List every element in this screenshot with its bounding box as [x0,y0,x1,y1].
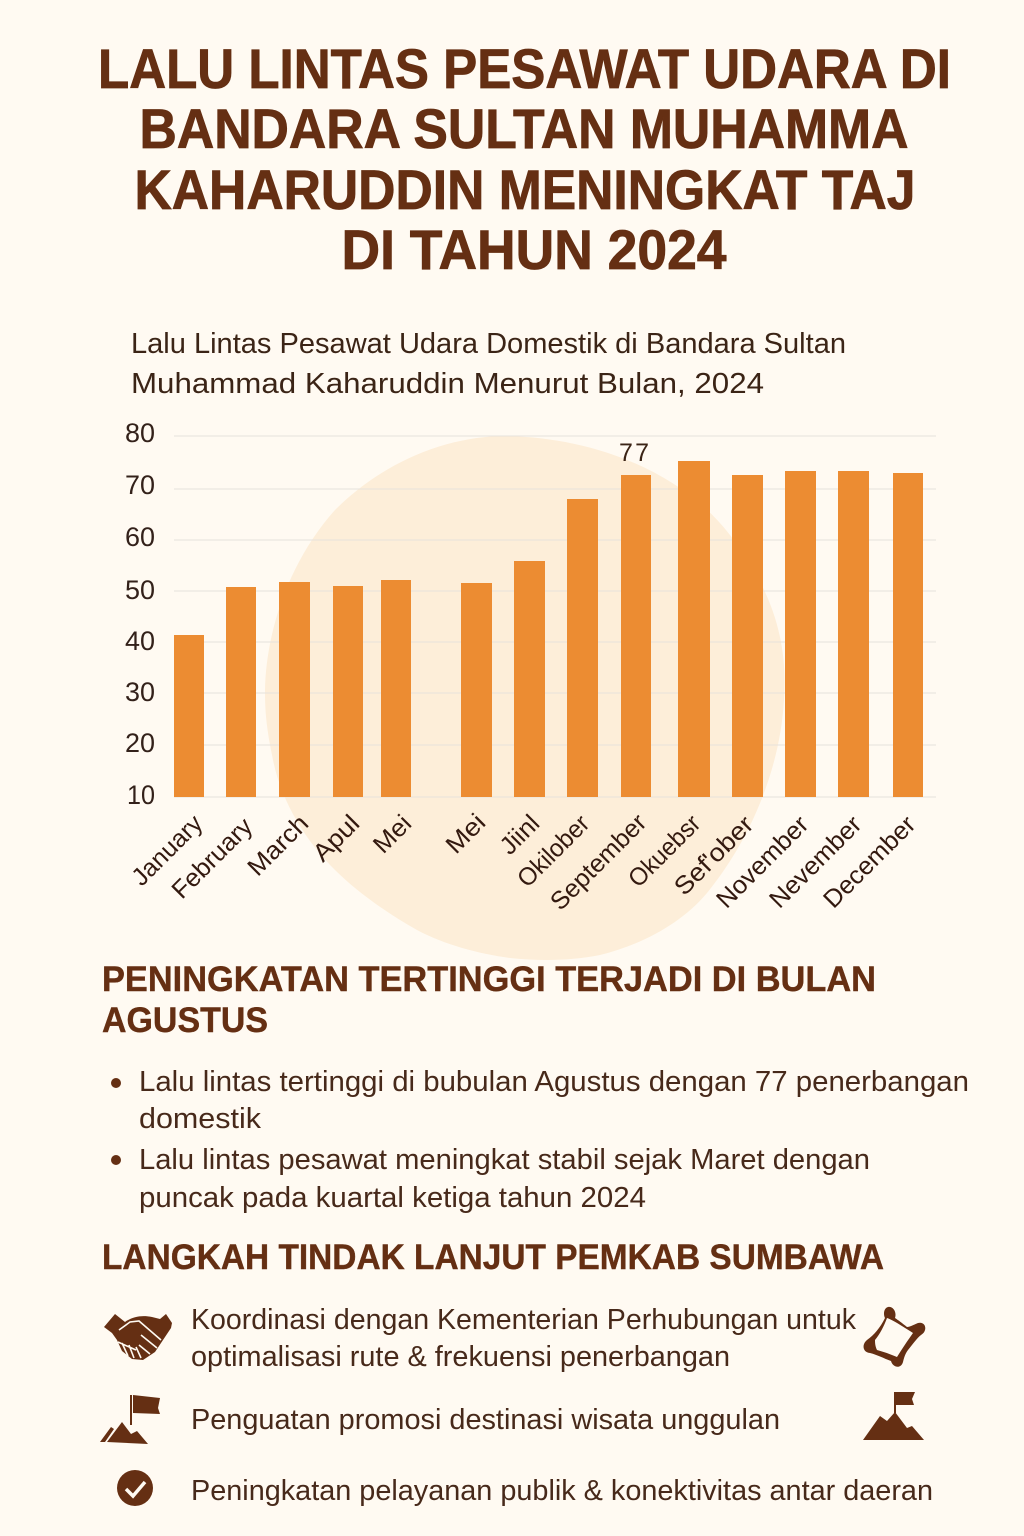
icon: mountain flag [863,1392,924,1440]
y axis labels: 70 [125,470,155,500]
y axis labels: 60 [125,522,155,552]
month labels: Sef'ober [669,810,759,901]
month labels: January [126,809,209,891]
month labels: Okuebsr [623,809,706,893]
title: LALU LINTAS PESAWAT UDARA DI [98,37,951,100]
title: BANDARA SULTAN MUHAMMA [140,97,908,160]
y axis labels [125,418,155,810]
bullet list: Lalu lintas tertinggi di bubulan Agustus dengan 77 penerbangan [139,1066,969,1098]
month labels: Mei [440,808,491,859]
y axis labels: 20 [125,728,155,758]
action text 1 [191,1304,856,1373]
month labels: Nevember [764,810,867,914]
heading: peningkatan tertinggi: AGUSTUS [102,1001,268,1040]
icon: map scroll [864,1307,925,1367]
y axis labels: 50 [125,575,155,605]
bullet list: Lalu lintas pesawat meningkat stabil sejak Maret dengan [139,1144,870,1176]
heading: peningkatan tertinggi [102,960,876,1040]
action text 3: Peningkatan pelayanan publik & konektivitas antar daeran [191,1475,933,1507]
month labels: September [545,808,652,916]
title: KAHARUDDIN MENINGKAT TAJ [134,158,916,221]
bullet list: domestik [139,1103,262,1135]
action text 2: Penguatan promosi destinasi wisata unggulan [191,1404,780,1436]
action text 1: optimalisasi rute & frekuensi penerbangan [191,1341,730,1373]
chart subtitle: Lalu Lintas Pesawat Udara Domestik di Bandara Sultan [131,328,846,360]
bullet list [111,1066,969,1214]
heading: langkah tindak lanjut: LANGKAH TINDAK LANJUT PEMKAB SUMBAWA [102,1238,884,1277]
month labels: Apul [307,809,365,867]
bar chart [125,418,936,916]
bars [174,461,923,797]
background blob [265,436,785,960]
y axis labels: 10 [127,780,155,810]
icon: check circle [117,1470,153,1506]
chart subtitle [131,328,846,400]
month labels: Mei [368,809,417,859]
y axis labels: 40 [125,626,155,656]
y axis labels: 80 [125,418,155,448]
bullet list: puncak pada kuartal ketiga tahun 2024 [139,1182,646,1214]
month labels: March [242,809,314,882]
title: DI TAHUN 2024 [342,218,726,281]
month labels: February [166,812,259,904]
month labels: November [711,810,814,914]
icon: handshake [104,1314,172,1360]
month labels: Okilober [512,809,595,893]
month labels: Jiinl [494,809,545,860]
y axis labels: 30 [125,677,155,707]
chart subtitle: Muhammad Kaharuddin Menurut Bulan, 2024 [131,368,764,400]
title [98,37,951,281]
month labels: December [818,810,921,914]
value label: 77 [619,439,649,467]
month labels [126,808,921,916]
action text 1: Koordinasi dengan Kementerian Perhubungan untuk [191,1304,856,1336]
heading: peningkatan tertinggi: PENINGKATAN TERTINGGI TERJADI DI BULAN [102,960,876,999]
icon: flag on small peaks [100,1395,160,1444]
